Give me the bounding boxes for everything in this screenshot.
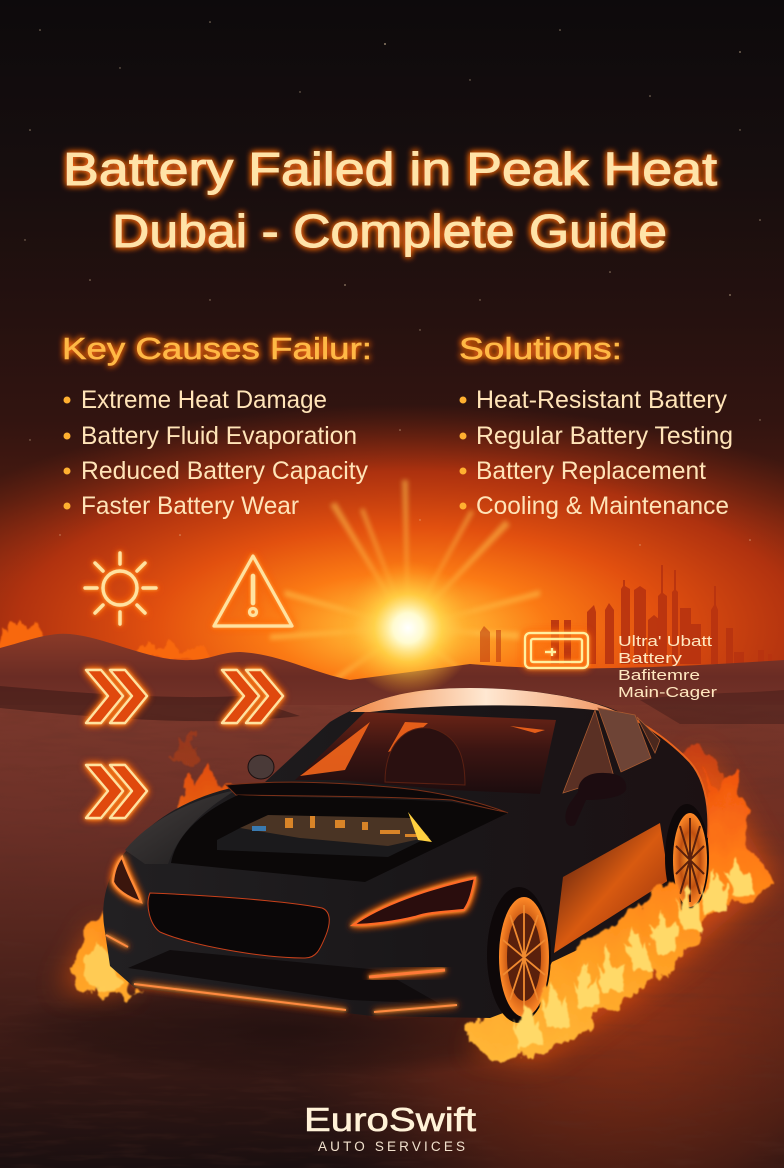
solution list: Battery Replacement xyxy=(476,457,706,485)
roof highlight xyxy=(350,688,622,714)
desert ground xyxy=(0,705,784,1168)
windshield xyxy=(295,712,556,794)
left mirror xyxy=(248,755,274,779)
sun core xyxy=(340,560,476,696)
city skyline xyxy=(480,565,772,664)
icon: sun xyxy=(85,553,156,624)
ground shadow under car xyxy=(0,980,590,1080)
fire glow halo xyxy=(60,750,775,1060)
solution list xyxy=(460,386,733,520)
front grille xyxy=(148,893,329,958)
front wheel xyxy=(487,887,551,1023)
car body xyxy=(103,688,708,1018)
flames in front of the car xyxy=(530,880,700,1030)
engine bay xyxy=(171,795,508,882)
rear rim light xyxy=(622,713,708,838)
cause list: Battery Fluid Evaporation xyxy=(81,422,357,450)
side windows xyxy=(563,708,660,793)
battery label: Battery xyxy=(618,650,683,667)
door fire reflection xyxy=(554,823,669,953)
desert dunes xyxy=(0,634,784,720)
windshield reflections xyxy=(300,722,545,776)
sun rays xyxy=(270,480,540,706)
heading: solutions: Solutions: xyxy=(459,331,622,366)
flames around the car xyxy=(66,765,776,1060)
stars xyxy=(24,21,761,546)
cause list: Reduced Battery Capacity xyxy=(81,457,368,485)
title: Battery Failed in Peak Heat xyxy=(63,143,717,195)
car xyxy=(103,688,709,1023)
rear wheel xyxy=(665,804,709,912)
icon: warning triangle xyxy=(214,556,292,626)
battery label: Bafitemre xyxy=(618,667,700,684)
icon: chevrons row 2 xyxy=(86,765,147,818)
panel: key causes xyxy=(62,331,372,520)
heading: causes: Key Causes Failur: xyxy=(62,331,372,366)
sand texture xyxy=(0,705,784,1168)
right headlight xyxy=(353,878,475,925)
cause list: Extreme Heat Damage xyxy=(81,386,327,414)
panel: solutions xyxy=(459,331,733,520)
cause list: Faster Battery Wear xyxy=(81,492,299,520)
bright left flame xyxy=(82,940,122,990)
title: Dubai - Complete Guide xyxy=(112,205,667,257)
title xyxy=(63,143,717,257)
car seats xyxy=(385,728,465,785)
battery label xyxy=(618,633,717,701)
front light strips xyxy=(106,935,457,1012)
brand logo: EuroSwift xyxy=(304,1101,476,1138)
right mirror xyxy=(565,773,626,826)
engine parts and battery xyxy=(217,812,432,857)
icon: battery xyxy=(525,633,588,668)
lower bumper intake xyxy=(128,950,440,1004)
brand logo xyxy=(304,1101,476,1154)
ground glow from fire xyxy=(0,705,784,1168)
horizon flames xyxy=(0,616,216,662)
battery label: Main-Cager xyxy=(618,684,717,701)
background flames beside the car xyxy=(172,730,735,860)
battery label: Ultra' Ubatt xyxy=(618,633,713,650)
sun glow across the horizon xyxy=(0,390,784,740)
brand logo: AUTO SERVICES xyxy=(318,1139,465,1154)
dark dune band xyxy=(0,686,300,721)
open hood xyxy=(226,782,508,813)
right dune band xyxy=(640,690,784,724)
cause list xyxy=(64,386,368,520)
lower lamp xyxy=(369,970,445,977)
left fender highlight xyxy=(125,790,236,864)
solution list: Regular Battery Testing xyxy=(476,422,733,450)
bright flame tongues xyxy=(512,856,756,1045)
solution list: Cooling & Maintenance xyxy=(476,492,729,520)
left headlight xyxy=(113,857,141,902)
icon: chevrons row 1 left xyxy=(86,670,147,723)
icon: chevrons row 1 right xyxy=(222,670,283,723)
solution list: Heat-Resistant Battery xyxy=(476,386,727,414)
